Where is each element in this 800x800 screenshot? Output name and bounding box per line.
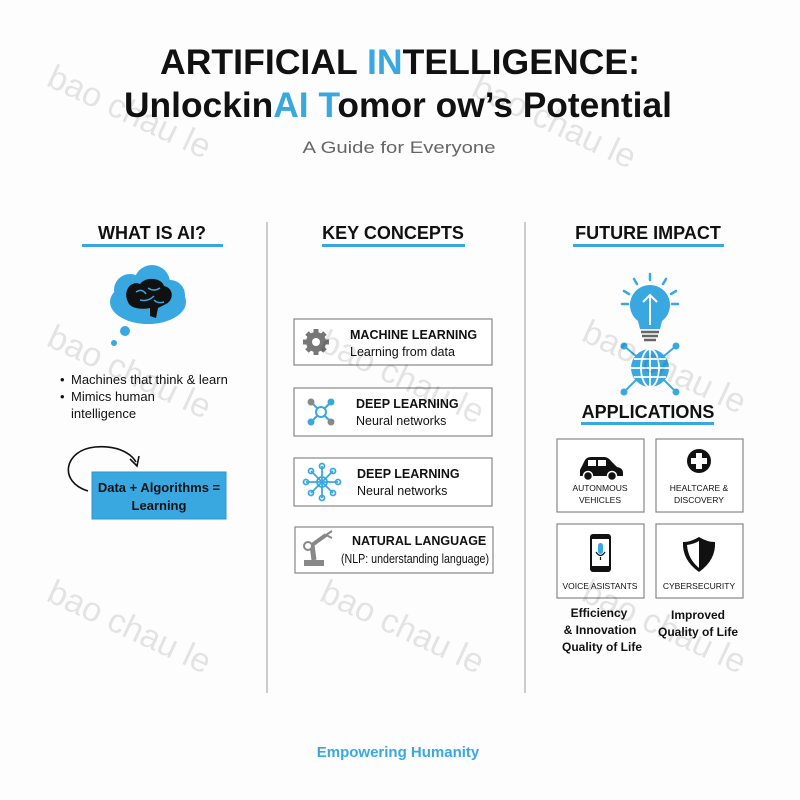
icon: thought cloud with brain	[110, 265, 186, 346]
card: healthcare: DISCOVERY	[674, 495, 724, 505]
text: efficiency	[562, 606, 642, 654]
card: autonomous vehicles: AUTONMOUS	[572, 483, 628, 493]
card: cybersecurity	[656, 524, 743, 598]
panel: deep learning 2	[294, 458, 492, 506]
card: voice assistants: VOICE ASISTANTS	[563, 581, 638, 591]
panel: machine learning	[294, 319, 492, 365]
panel: deep learning 2: DEEP LEARNING	[357, 467, 460, 481]
panel: machine learning: Learning from data	[350, 345, 455, 359]
subtitle: A Guide for Everyone	[302, 138, 496, 157]
watermarks: bao chau le	[577, 313, 752, 422]
callout: data + algorithms: Data + Algorithms =	[98, 480, 221, 495]
bullets: what is AI: Mimics human	[71, 389, 155, 404]
text: improved quality	[658, 608, 738, 639]
watermarks	[42, 58, 752, 682]
panel: machine learning: MACHINE LEARNING	[350, 328, 477, 342]
watermarks: bao chau le	[577, 573, 752, 682]
title: UnlockinAI Tomor ow’s Potential	[124, 86, 672, 125]
text: efficiency: Quality of Life	[562, 640, 642, 654]
callout: data + algorithms	[92, 472, 226, 519]
text: efficiency: Efficiency	[571, 606, 628, 620]
dividers	[266, 222, 268, 693]
panel: natural language: (NLP: understanding language)	[341, 552, 489, 566]
watermarks: bao chau le	[42, 318, 217, 427]
bullets: what is AI: •	[60, 389, 65, 404]
card: autonomous vehicles	[557, 439, 644, 512]
card: voice assistants	[557, 524, 644, 598]
callout: data + algorithms: Learning	[132, 498, 187, 513]
panel: deep learning 1: Neural networks	[356, 414, 446, 428]
icon: lightbulb	[622, 274, 678, 340]
arrowhead	[130, 456, 139, 466]
watermarks: bao chau le	[42, 573, 217, 682]
title: ARTIFICIAL INTELLIGENCE:	[160, 43, 640, 82]
heading: what is AI	[82, 223, 223, 247]
bullets: what is AI: intelligence	[71, 406, 136, 421]
arrow: loop	[68, 447, 136, 491]
card: healthcare	[656, 439, 743, 512]
watermarks: bao chau le	[315, 573, 490, 682]
text: improved quality: Quality of Life	[658, 625, 738, 639]
footer: Empowering Humanity	[317, 744, 480, 761]
heading: future impact: FUTURE IMPACT	[575, 223, 721, 243]
panel: deep learning 2: Neural networks	[357, 484, 447, 498]
heading: key concepts: KEY CONCEPTS	[322, 223, 464, 243]
text: improved quality: Improved	[671, 608, 725, 622]
watermarks: bao chau le	[315, 323, 490, 432]
bullets: what is AI: •	[60, 372, 65, 387]
title	[124, 43, 672, 125]
bullets: what is AI	[60, 372, 228, 421]
heading: applications: APPLICATIONS	[582, 402, 714, 422]
card: healthcare: HEALTCARE &	[670, 483, 729, 493]
heading: what is AI: WHAT IS AI?	[98, 223, 206, 243]
card: cybersecurity: CYBERSECURITY	[663, 581, 735, 591]
panel: natural language: NATURAL LANGUAGE	[352, 534, 486, 548]
watermarks: bao chau le	[467, 68, 642, 177]
panel: deep learning 1	[294, 388, 492, 436]
card: autonomous vehicles: VEHICLES	[579, 495, 621, 505]
text: efficiency: & Innovation	[564, 623, 636, 637]
icon: globe network	[620, 342, 680, 396]
bullets: what is AI: Machines that think & learn	[71, 372, 228, 387]
panel: deep learning 1: DEEP LEARNING	[356, 397, 459, 411]
panel: natural language	[295, 527, 493, 573]
watermarks: bao chau le	[42, 58, 217, 167]
